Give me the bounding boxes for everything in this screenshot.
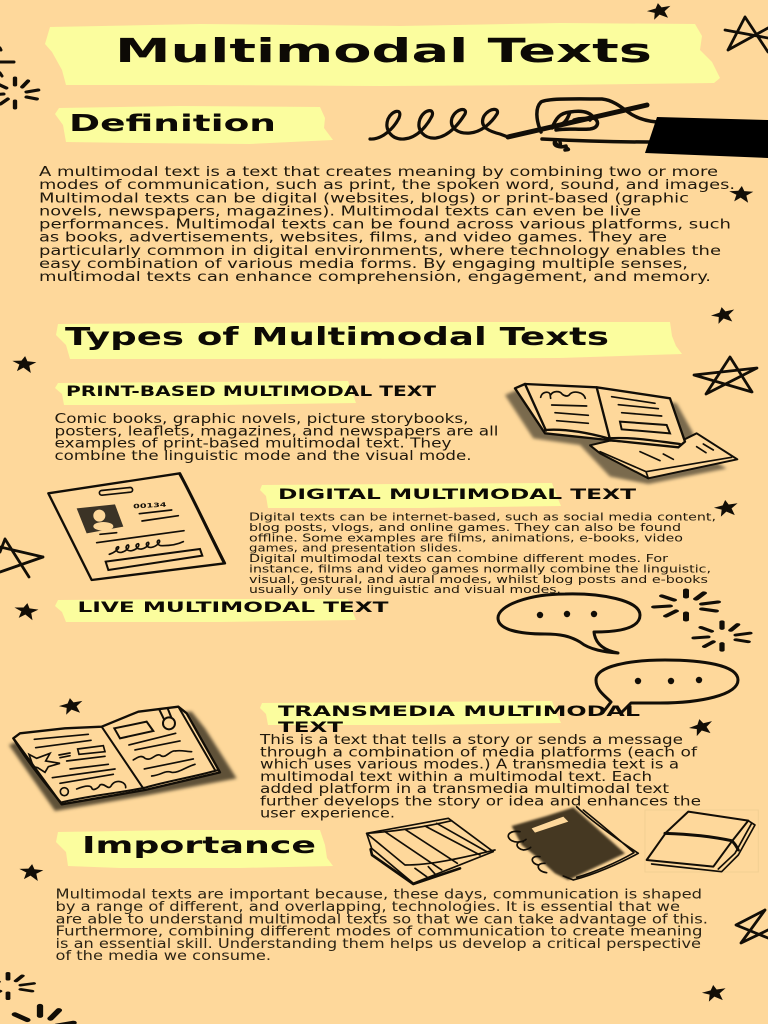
- transmedia paragraph: This is a text that tells a story or sends a message: [259, 733, 683, 748]
- definition paragraph: particularly common in digital environments, where technology enables the: [39, 244, 721, 259]
- digital paragraph: games, and presentation slides.: [249, 542, 462, 555]
- print-based highlight band: [55, 381, 356, 405]
- digital paragraph: usually only use linguistic and visual modes.: [249, 583, 561, 596]
- title: Multimodal Texts: [115, 31, 652, 70]
- print-based paragraph: [54, 412, 498, 464]
- icon: ID card: 00134: [133, 502, 167, 510]
- print-based heading: PRINT-BASED MULTIMODAL TEXT: [66, 384, 437, 400]
- definition highlight band: [55, 106, 333, 144]
- transmedia heading: [278, 704, 640, 736]
- icon: speech bubble two: [596, 660, 738, 712]
- live heading: LIVE MULTIMODAL TEXT: [78, 600, 389, 616]
- transmedia paragraph: which uses various modes.) A transmedia text is a: [260, 758, 679, 772]
- importance heading: Importance: [82, 833, 316, 859]
- digital paragraph: instance, films and video games normally combine the linguistic,: [249, 562, 711, 575]
- definition paragraph: Multimodal texts can be digital (websites, blogs) or print-based (graphic: [39, 191, 689, 206]
- definition paragraph: [39, 165, 735, 285]
- importance paragraph: of the media we consume.: [56, 949, 271, 964]
- print-based paragraph: combine the linguistic mode and the visual mode.: [54, 449, 472, 464]
- digital paragraph: Digital multimodal texts can combine different modes. For: [249, 552, 669, 565]
- transmedia paragraph: multimodal text within a multimodal text. Each: [260, 770, 652, 785]
- icon: speech bubble one: [498, 594, 640, 653]
- types highlight band: [56, 322, 682, 359]
- importance paragraph: Multimodal texts are important because, these days, communication is shaped: [56, 888, 702, 903]
- icon: stacked open books: [505, 384, 737, 484]
- definition paragraph: multimodal texts can enhance comprehension, engagement, and memory.: [39, 270, 711, 285]
- transmedia heading: TEXT: [278, 720, 344, 736]
- icon: closed journal with band: [645, 810, 758, 872]
- print-based paragraph: posters, leaflets, magazines, and newspapers are all: [54, 424, 498, 439]
- icon: dark spiral notebook: [508, 807, 638, 880]
- transmedia paragraph: through a combination of media platforms (each of: [260, 745, 698, 760]
- definition paragraph: easy combination of various media forms. By engaging multiple senses,: [39, 257, 688, 272]
- transmedia paragraph: user experience.: [260, 806, 395, 822]
- digital highlight band: [260, 483, 561, 508]
- title highlight band: [45, 23, 720, 86]
- digital paragraph: blog posts, vlogs, and online games. They can also be found: [249, 521, 681, 534]
- importance highlight band: [56, 830, 333, 868]
- importance paragraph: by a range of different, and overlapping, technologies. It is essential that we: [56, 900, 680, 915]
- live highlight band: [55, 599, 356, 622]
- digital paragraph: [249, 511, 716, 596]
- types heading: Types of Multimodal Texts: [65, 322, 609, 351]
- icon: open notebook: [9, 707, 237, 811]
- digital paragraph: Digital texts can be internet-based, such as social media content,: [249, 511, 716, 524]
- digital paragraph: offline. Some examples are films, animations, e-books, video: [249, 531, 683, 544]
- transmedia highlight band: [260, 701, 561, 725]
- importance paragraph: Furthermore, combining different modes of communication to create meaning: [56, 925, 702, 940]
- importance paragraph: [56, 888, 708, 964]
- importance paragraph: is an essential skill. Understanding them helps us develop a critical perspective: [56, 937, 701, 952]
- definition paragraph: performances. Multimodal texts can be found across various platforms, such: [39, 217, 731, 232]
- icon: lined paper stack: [367, 818, 495, 884]
- print-based paragraph: examples of print-based multimodal text. They: [54, 437, 452, 452]
- transmedia paragraph: [259, 733, 701, 822]
- digital paragraph: visual, gestural, and aural modes, whilst blog posts and e-books: [249, 573, 708, 586]
- digital heading: DIGITAL MULTIMODAL TEXT: [278, 487, 637, 503]
- definition heading: Definition: [69, 111, 276, 137]
- transmedia paragraph: further develops the story or idea and enhances the: [260, 794, 701, 809]
- print-based paragraph: Comic books, graphic novels, picture storybooks,: [54, 412, 468, 427]
- icon: hand writing scribble: [370, 99, 768, 158]
- definition paragraph: novels, newspapers, magazines). Multimodal texts can even be live: [39, 205, 641, 220]
- transmedia heading: TRANSMEDIA MULTIMODAL: [278, 704, 640, 720]
- transmedia paragraph: added platform in a transmedia multimodal text: [260, 782, 669, 797]
- importance paragraph: are able to understand multimodal texts so that we can take advantage of this.: [56, 912, 708, 927]
- definition paragraph: A multimodal text is a text that creates meaning by combining two or more: [39, 165, 718, 180]
- definition paragraph: as books, advertisements, websites, films, and video games. They are: [39, 231, 667, 246]
- definition paragraph: modes of communication, such as print, the spoken word, sound, and images.: [39, 178, 735, 193]
- icon: ID card: [48, 473, 225, 580]
